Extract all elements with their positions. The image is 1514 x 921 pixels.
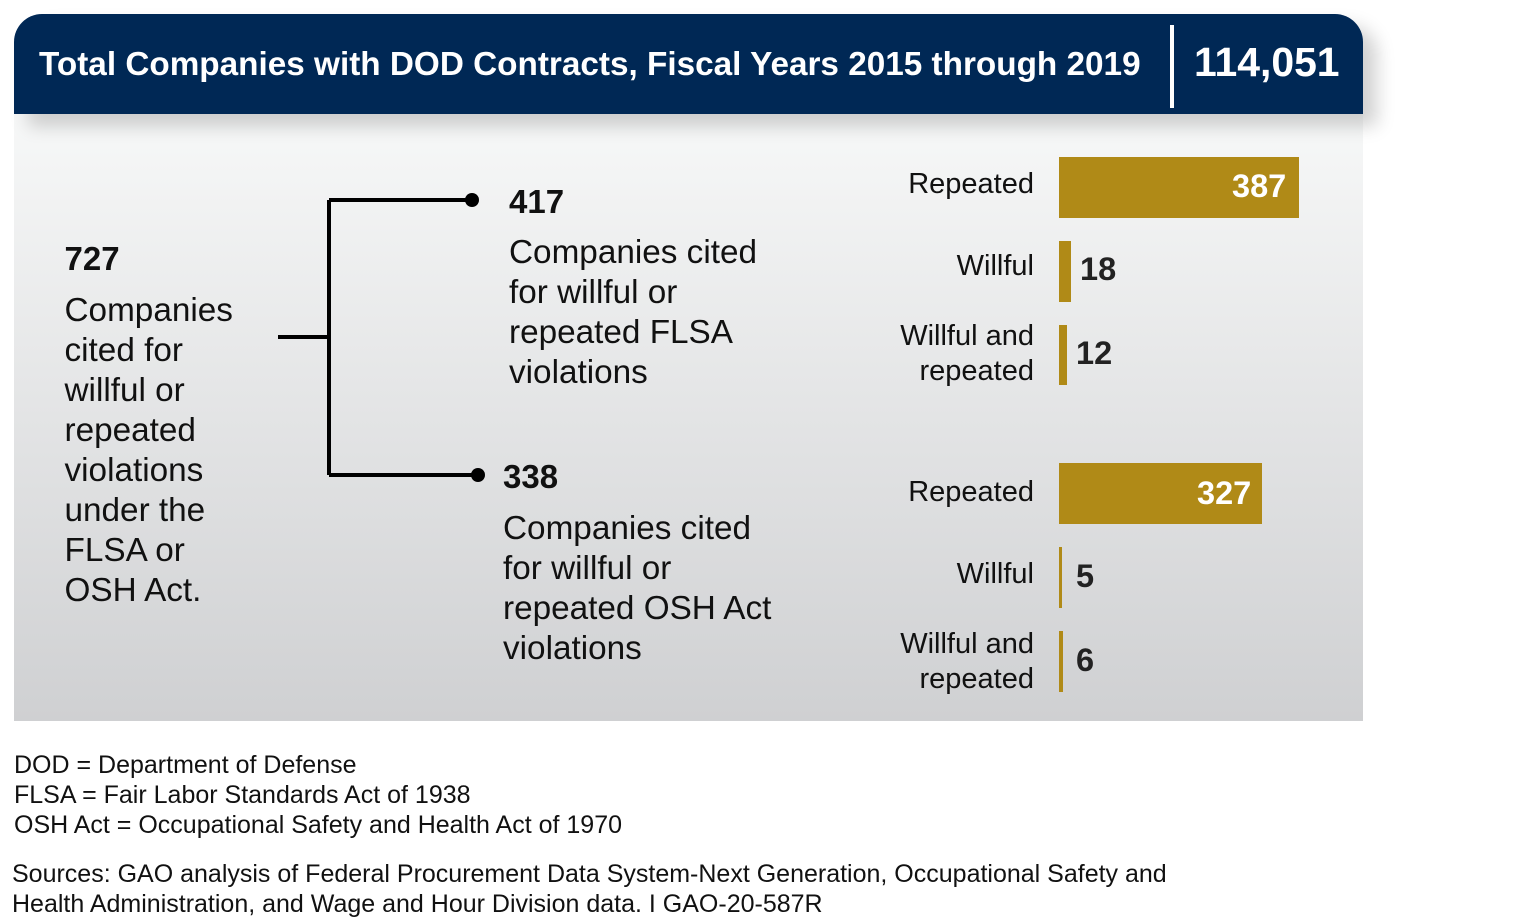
value: 387: 387: [1232, 168, 1286, 204]
legend: abbreviations: FLSA = Fair Labor Standards Act of 1938: [14, 781, 471, 809]
connector: bracket: [278, 193, 485, 482]
text: 727 companies: willful or: [64, 372, 185, 409]
value: 12: 12: [1076, 335, 1112, 371]
legend: abbreviations: OSH Act = Occupational Safety and Health Act of 1970: [14, 811, 622, 839]
text: 727 companies: violations: [64, 452, 203, 489]
text: 727 companies: under the: [64, 492, 205, 529]
label: willful and repeated OSH: [900, 628, 1034, 695]
bar: willful and repeated OSH: [1059, 631, 1063, 692]
text: 417 FLSA: Companies cited: [509, 234, 757, 271]
text: 338 OSH: [503, 458, 772, 667]
text: 417 FLSA: violations: [509, 354, 648, 391]
heading: total companies: Total Companies with DOD Contracts, Fiscal Years 2015 through 2019: [39, 46, 1141, 83]
text: sources: Sources: GAO analysis of Federal Procurement Data System-Next Generation, Occupational Safety and: [12, 860, 1167, 888]
legend: abbreviations: DOD = Department of Defense: [14, 751, 357, 779]
text: 727 companies: OSH Act.: [64, 572, 201, 609]
label: willful and repeated OSH: repeated: [920, 663, 1034, 695]
text: 338 OSH: violations: [503, 630, 642, 667]
text: 727 companies: repeated: [64, 412, 196, 449]
value: 18: 18: [1080, 251, 1116, 287]
label: willful FLSA: Willful: [957, 250, 1034, 282]
number: total: 114,051: [1194, 39, 1340, 85]
text: 727 companies: [64, 240, 233, 609]
label: willful and repeated FLSA: [900, 320, 1034, 387]
bar: willful and repeated FLSA: [1059, 325, 1067, 385]
text: 417 FLSA: for willful or: [509, 274, 677, 311]
bar: willful FLSA: [1059, 241, 1071, 302]
text: 417 FLSA: repeated FLSA: [509, 314, 733, 351]
text: 417 FLSA: [509, 183, 757, 391]
text: 727 companies: FLSA or: [64, 532, 185, 569]
label: willful and repeated FLSA: repeated: [920, 355, 1034, 387]
bar: repeated FLSA: [1059, 157, 1299, 218]
bar: willful OSH: [1059, 547, 1062, 608]
divider: [1170, 25, 1174, 108]
label: willful and repeated OSH: Willful and: [900, 628, 1034, 660]
text: 727 companies: cited for: [64, 332, 183, 369]
label: repeated OSH: Repeated: [908, 476, 1034, 508]
text: 338 OSH: for willful or: [503, 550, 671, 587]
text: 338 OSH: Companies cited: [503, 510, 751, 547]
panel: gray gradient body: [14, 114, 1363, 721]
label: willful and repeated FLSA: Willful and: [900, 320, 1034, 352]
bar: repeated OSH: [1059, 463, 1262, 524]
legend: abbreviations: [14, 751, 622, 839]
panel: header banner: [14, 14, 1363, 114]
text: sources: [12, 860, 1167, 918]
label: repeated FLSA: Repeated: [908, 168, 1034, 200]
text: 338 OSH: 338: [503, 458, 558, 495]
value: 6: 6: [1076, 642, 1094, 678]
value: 327: 327: [1197, 475, 1251, 511]
value: 5: 5: [1076, 558, 1094, 594]
text: 727 companies: Companies: [64, 292, 233, 329]
text: 417 FLSA: 417: [509, 183, 564, 220]
text: 338 OSH: repeated OSH Act: [503, 590, 771, 627]
label: willful OSH: Willful: [957, 558, 1034, 590]
text: sources: Health Administration, and Wage and Hour Division data. I GAO-20-587R: [12, 890, 823, 918]
text: 727 companies: 727: [64, 240, 120, 277]
